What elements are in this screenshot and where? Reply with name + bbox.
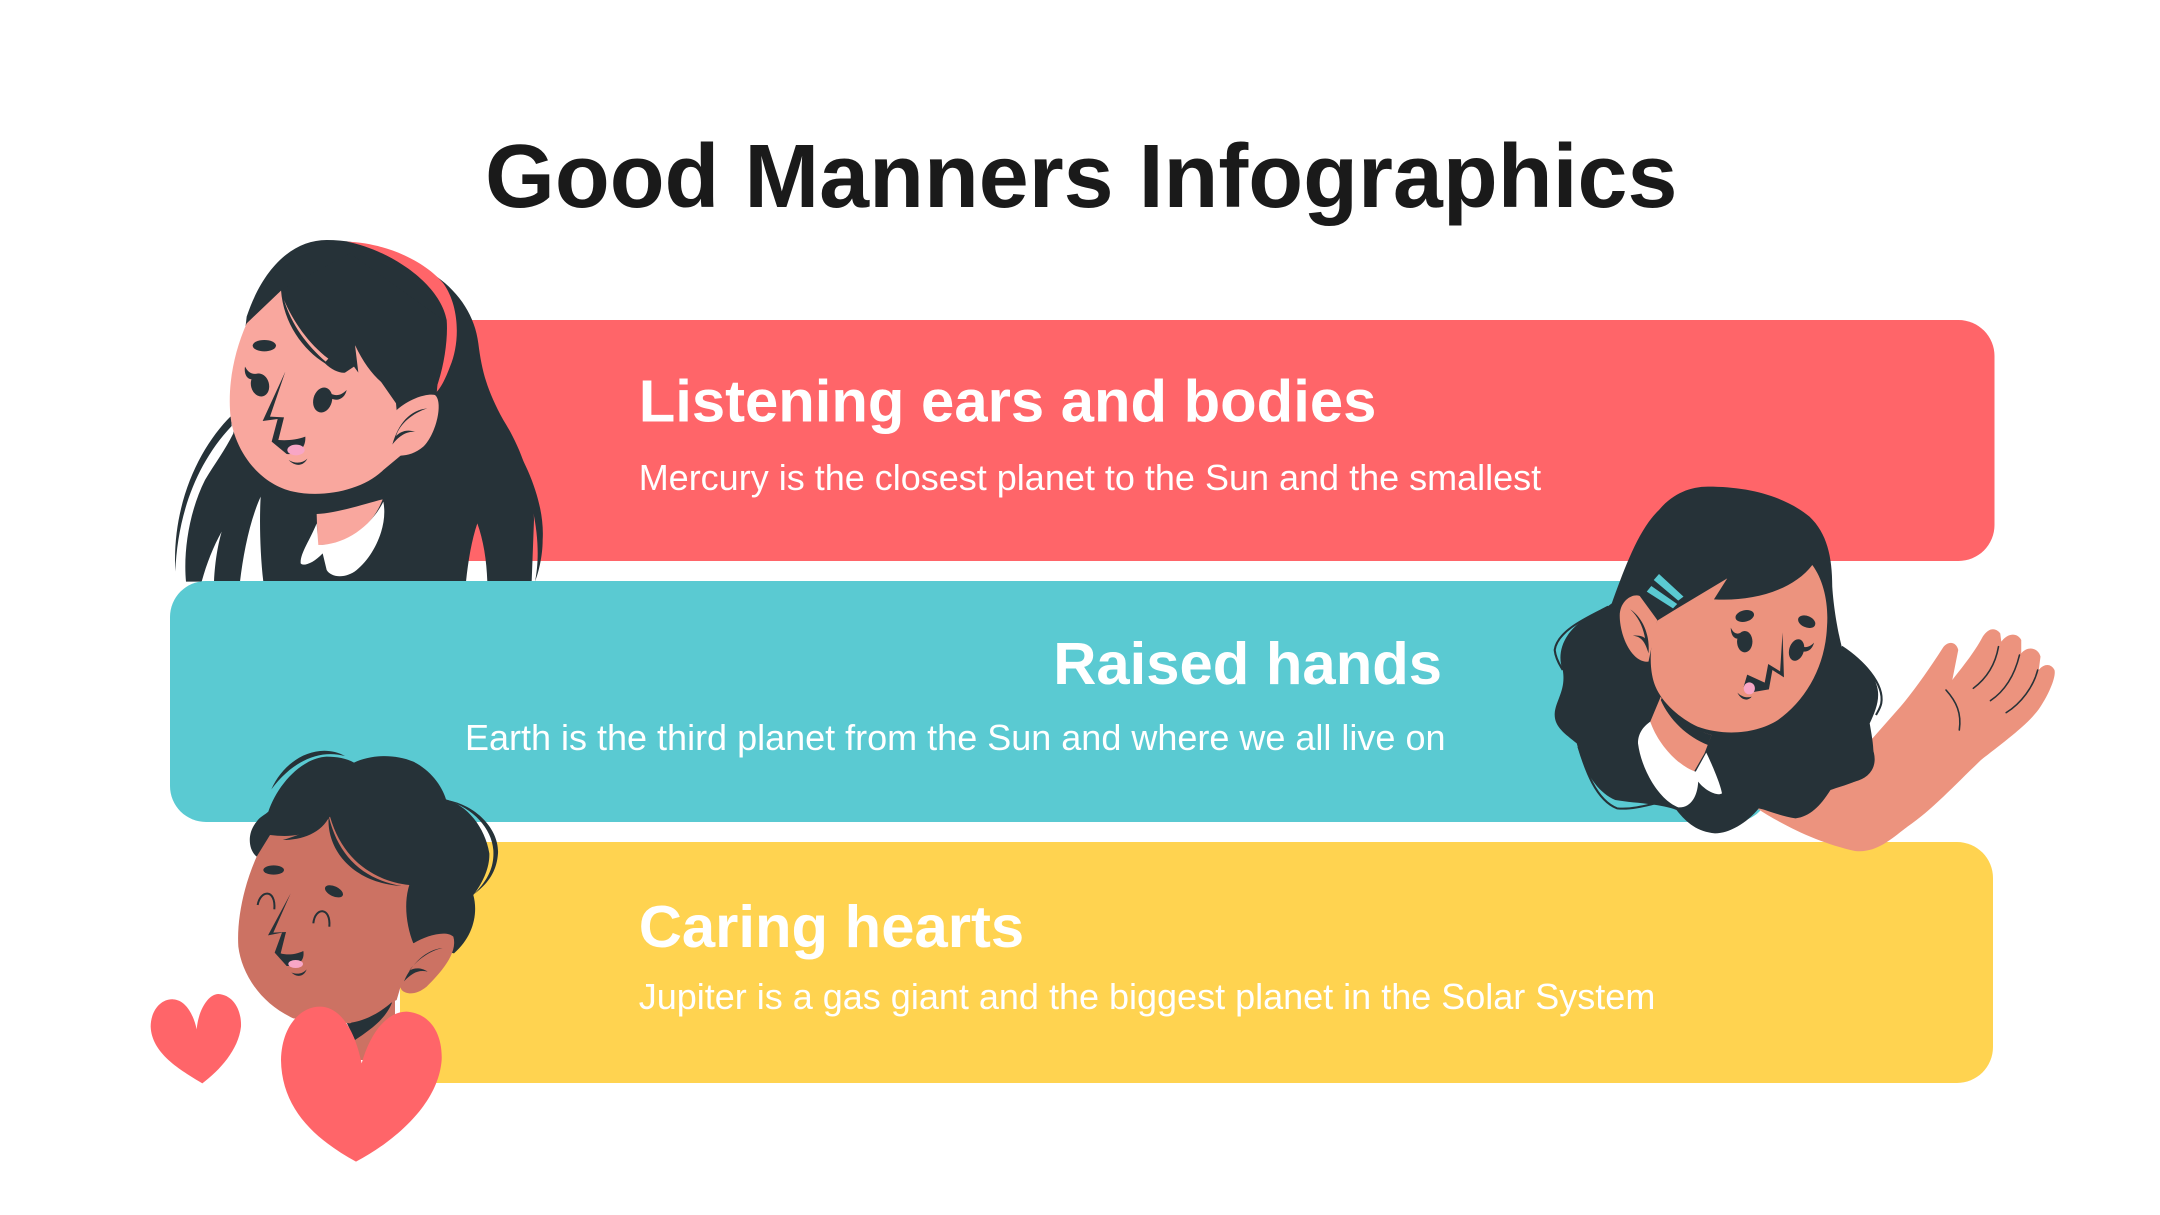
tongue bbox=[287, 445, 305, 455]
illustration: girl with headband bbox=[175, 240, 543, 582]
ear lines bbox=[392, 408, 427, 445]
ear lines bbox=[404, 948, 443, 981]
tongue bbox=[1744, 682, 1755, 694]
hair bbox=[1555, 487, 1878, 833]
panel: listening ears and bodies bbox=[340, 320, 1994, 561]
yellow bar bbox=[400, 842, 1993, 1083]
ear bbox=[393, 934, 454, 993]
panel: caring hearts bbox=[400, 842, 1993, 1083]
eyes bbox=[1731, 628, 1814, 662]
tongue bbox=[288, 960, 303, 968]
ear bbox=[1620, 595, 1657, 662]
hair fringe bbox=[283, 815, 402, 886]
illustration: boy with hearts bbox=[151, 751, 498, 1162]
red bar bbox=[340, 320, 1994, 561]
heading: caring hearts: Caring hearts bbox=[639, 893, 1024, 960]
text: earth: Earth is the third planet from the Sun and where we all live on bbox=[465, 717, 1446, 758]
heading: listening: Listening ears and bodies bbox=[639, 368, 1376, 434]
large heart bbox=[281, 1007, 442, 1162]
brows bbox=[263, 865, 345, 900]
small heart bbox=[151, 994, 241, 1083]
brow bbox=[253, 340, 276, 351]
thin hair strands bbox=[1555, 607, 1882, 809]
lip bbox=[289, 459, 307, 465]
hair clip bbox=[1647, 574, 1684, 608]
lip bbox=[291, 969, 307, 976]
eyes bbox=[245, 367, 347, 415]
bangs bbox=[281, 253, 443, 411]
neck bbox=[1650, 697, 1712, 772]
thin hair strands bbox=[271, 751, 498, 895]
title: Good Manners Infographics bbox=[485, 127, 1677, 227]
panel: raised hands bbox=[170, 581, 1770, 822]
illustration: waving girl bbox=[1555, 487, 2055, 851]
headband bbox=[347, 242, 457, 395]
collar bbox=[301, 502, 384, 576]
ear lines bbox=[1630, 609, 1649, 653]
neck shadow bbox=[347, 1002, 392, 1040]
nose and mouth bbox=[263, 372, 305, 454]
text: mercury: Mercury is the closest planet to the Sun and the smallest bbox=[639, 457, 1541, 498]
collar bbox=[1638, 722, 1722, 807]
teal bar bbox=[170, 581, 1770, 822]
hand lines bbox=[1946, 647, 2038, 730]
brows bbox=[1734, 608, 1817, 630]
hair bbox=[185, 240, 534, 582]
hair bbox=[250, 756, 489, 953]
text: jupiter: Jupiter is a gas giant and the biggest planet in the Solar System bbox=[639, 976, 1655, 1017]
face bbox=[238, 817, 413, 1023]
heading: raised hands: Raised hands bbox=[1053, 630, 1442, 697]
neck bbox=[347, 1000, 395, 1060]
arm and hand bbox=[1757, 629, 2055, 851]
face bbox=[1651, 565, 1827, 732]
neck bbox=[317, 499, 383, 545]
face bbox=[230, 290, 403, 494]
neck shadow bbox=[1661, 697, 1712, 745]
ear bbox=[392, 395, 439, 456]
nose and mouth bbox=[1744, 632, 1784, 692]
hair highlight bbox=[284, 300, 328, 362]
nose and mouth bbox=[268, 893, 304, 966]
closed eyes bbox=[258, 894, 329, 927]
lip bbox=[1737, 693, 1752, 700]
thin hair strands bbox=[175, 416, 232, 572]
